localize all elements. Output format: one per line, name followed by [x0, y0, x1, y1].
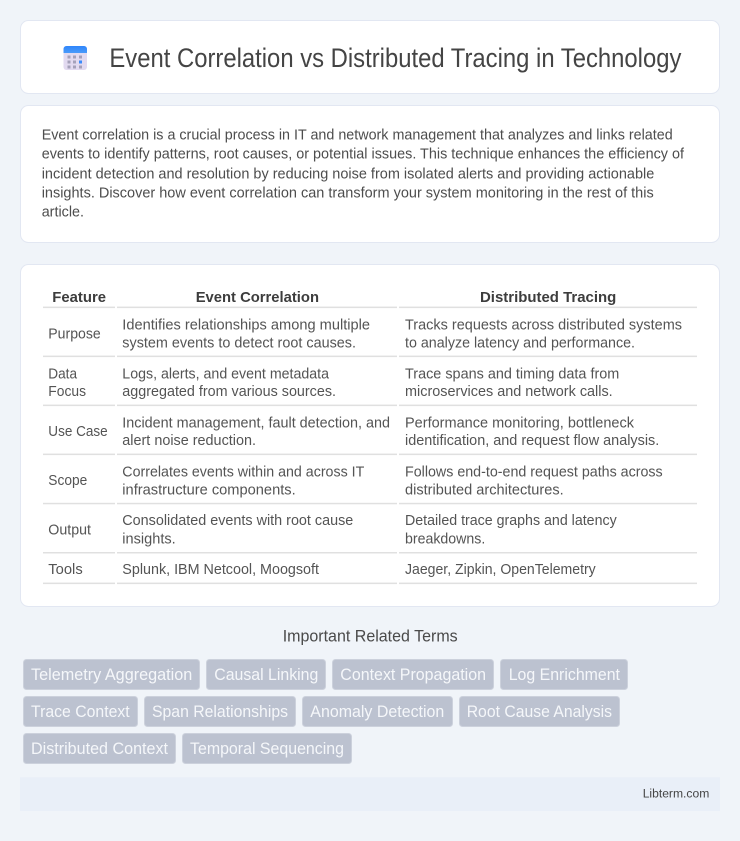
tag: temporal sequencing: Temporal Sequencing	[190, 739, 344, 758]
intro paragraph: article.	[42, 205, 84, 221]
footer	[20, 777, 720, 811]
tag: trace context: Trace Context	[31, 702, 130, 721]
tag: context propagation: Context Propagation	[340, 665, 486, 684]
row: scope: Correlates events within and across IT	[122, 464, 364, 480]
footer brand: Libterm.com	[643, 787, 709, 801]
tag: root cause analysis: Root Cause Analysis	[467, 702, 612, 721]
tag: root cause analysis	[460, 696, 620, 726]
row: scope: infrastructure components.	[122, 482, 296, 498]
intro paragraph: incident detection and resolution by reducing noise from isolated alerts and providing actionable	[42, 166, 654, 182]
tag: distributed context	[24, 734, 176, 764]
row: tools: Tools	[48, 562, 83, 578]
row: data focus: Logs, alerts, and event metadata	[122, 366, 330, 382]
row: scope: Follows end-to-end request paths across	[405, 464, 663, 480]
row: output: insights.	[122, 531, 176, 547]
tag: telemetry aggregation	[24, 660, 200, 690]
row: scope	[43, 464, 697, 504]
tag: telemetry aggregation: Telemetry Aggregation	[31, 665, 192, 684]
intro paragraph: Event correlation is a crucial process in IT and network management that analyzes and links related	[42, 127, 673, 143]
panel: comparison table	[20, 264, 720, 606]
tag: span relationships: Span Relationships	[152, 702, 288, 721]
row: scope: distributed architectures.	[405, 482, 564, 498]
table header row: Feature	[52, 289, 106, 306]
panel: introduction	[20, 106, 720, 242]
icon: calendar grid	[64, 46, 87, 70]
tag: anomaly detection	[302, 696, 452, 726]
title: Event Correlation vs Distributed Tracing in Technology	[109, 43, 682, 73]
tag: span relationships	[144, 696, 296, 726]
row: purpose: Tracks requests across distributed systems	[405, 317, 682, 333]
row: use case: Performance monitoring, bottleneck	[405, 415, 635, 431]
heading: important related terms: Important Related Terms	[283, 627, 458, 646]
row: output: breakdowns.	[405, 531, 485, 547]
table header row: Distributed Tracing	[480, 289, 616, 306]
row: tools: Jaeger, Zipkin, OpenTelemetry	[405, 562, 596, 578]
header panel	[20, 20, 720, 94]
row: purpose: to analyze latency and performance.	[405, 335, 635, 351]
tag: log enrichment	[500, 660, 628, 690]
intro paragraph: insights. Discover how event correlation can transform your system monitoring in the rest of this	[42, 185, 654, 201]
row: output: Output	[48, 522, 91, 538]
row: purpose: Purpose	[48, 326, 101, 342]
tag: temporal sequencing	[182, 734, 352, 764]
tag: distributed context: Distributed Context	[31, 739, 168, 758]
row: data focus	[43, 366, 697, 406]
tag list	[24, 660, 628, 764]
row: purpose: system events to detect root causes.	[122, 335, 356, 351]
row: use case: identification, and request flow analysis.	[405, 433, 659, 449]
row: output: Detailed trace graphs and latency	[405, 513, 617, 529]
row: scope: Scope	[48, 473, 87, 489]
row: use case: Use Case	[48, 424, 108, 440]
row: data focus: aggregated from various sources.	[122, 384, 336, 400]
intro paragraph	[42, 127, 685, 221]
tag: causal linking	[206, 660, 326, 690]
tag: trace context	[24, 696, 138, 726]
tag: context propagation	[332, 660, 494, 690]
row: data focus: microservices and network calls.	[405, 384, 613, 400]
row: tools: Splunk, IBM Netcool, Moogsoft	[122, 562, 319, 578]
tag: anomaly detection: Anomaly Detection	[310, 702, 444, 721]
tag: log enrichment: Log Enrichment	[509, 665, 620, 684]
row: data focus: Focus	[48, 384, 86, 400]
row: use case: Incident management, fault detection, and	[122, 415, 390, 431]
table header row	[43, 289, 697, 308]
row: data focus: Data	[48, 366, 78, 382]
row: purpose: Identifies relationships among multiple	[122, 317, 370, 333]
row: output	[43, 513, 697, 554]
row: purpose	[43, 317, 697, 357]
row: tools	[43, 562, 697, 584]
row: data focus: Trace spans and timing data from	[405, 366, 619, 382]
row: use case: alert noise reduction.	[122, 433, 256, 449]
intro paragraph: events to identify patterns, root causes, or potential issues. This technique enhances the efficiency of	[42, 147, 685, 163]
row: use case	[43, 415, 697, 455]
table header row: Event Correlation	[196, 289, 319, 306]
tag: causal linking: Causal Linking	[214, 665, 318, 684]
row: output: Consolidated events with root cause	[122, 513, 353, 529]
